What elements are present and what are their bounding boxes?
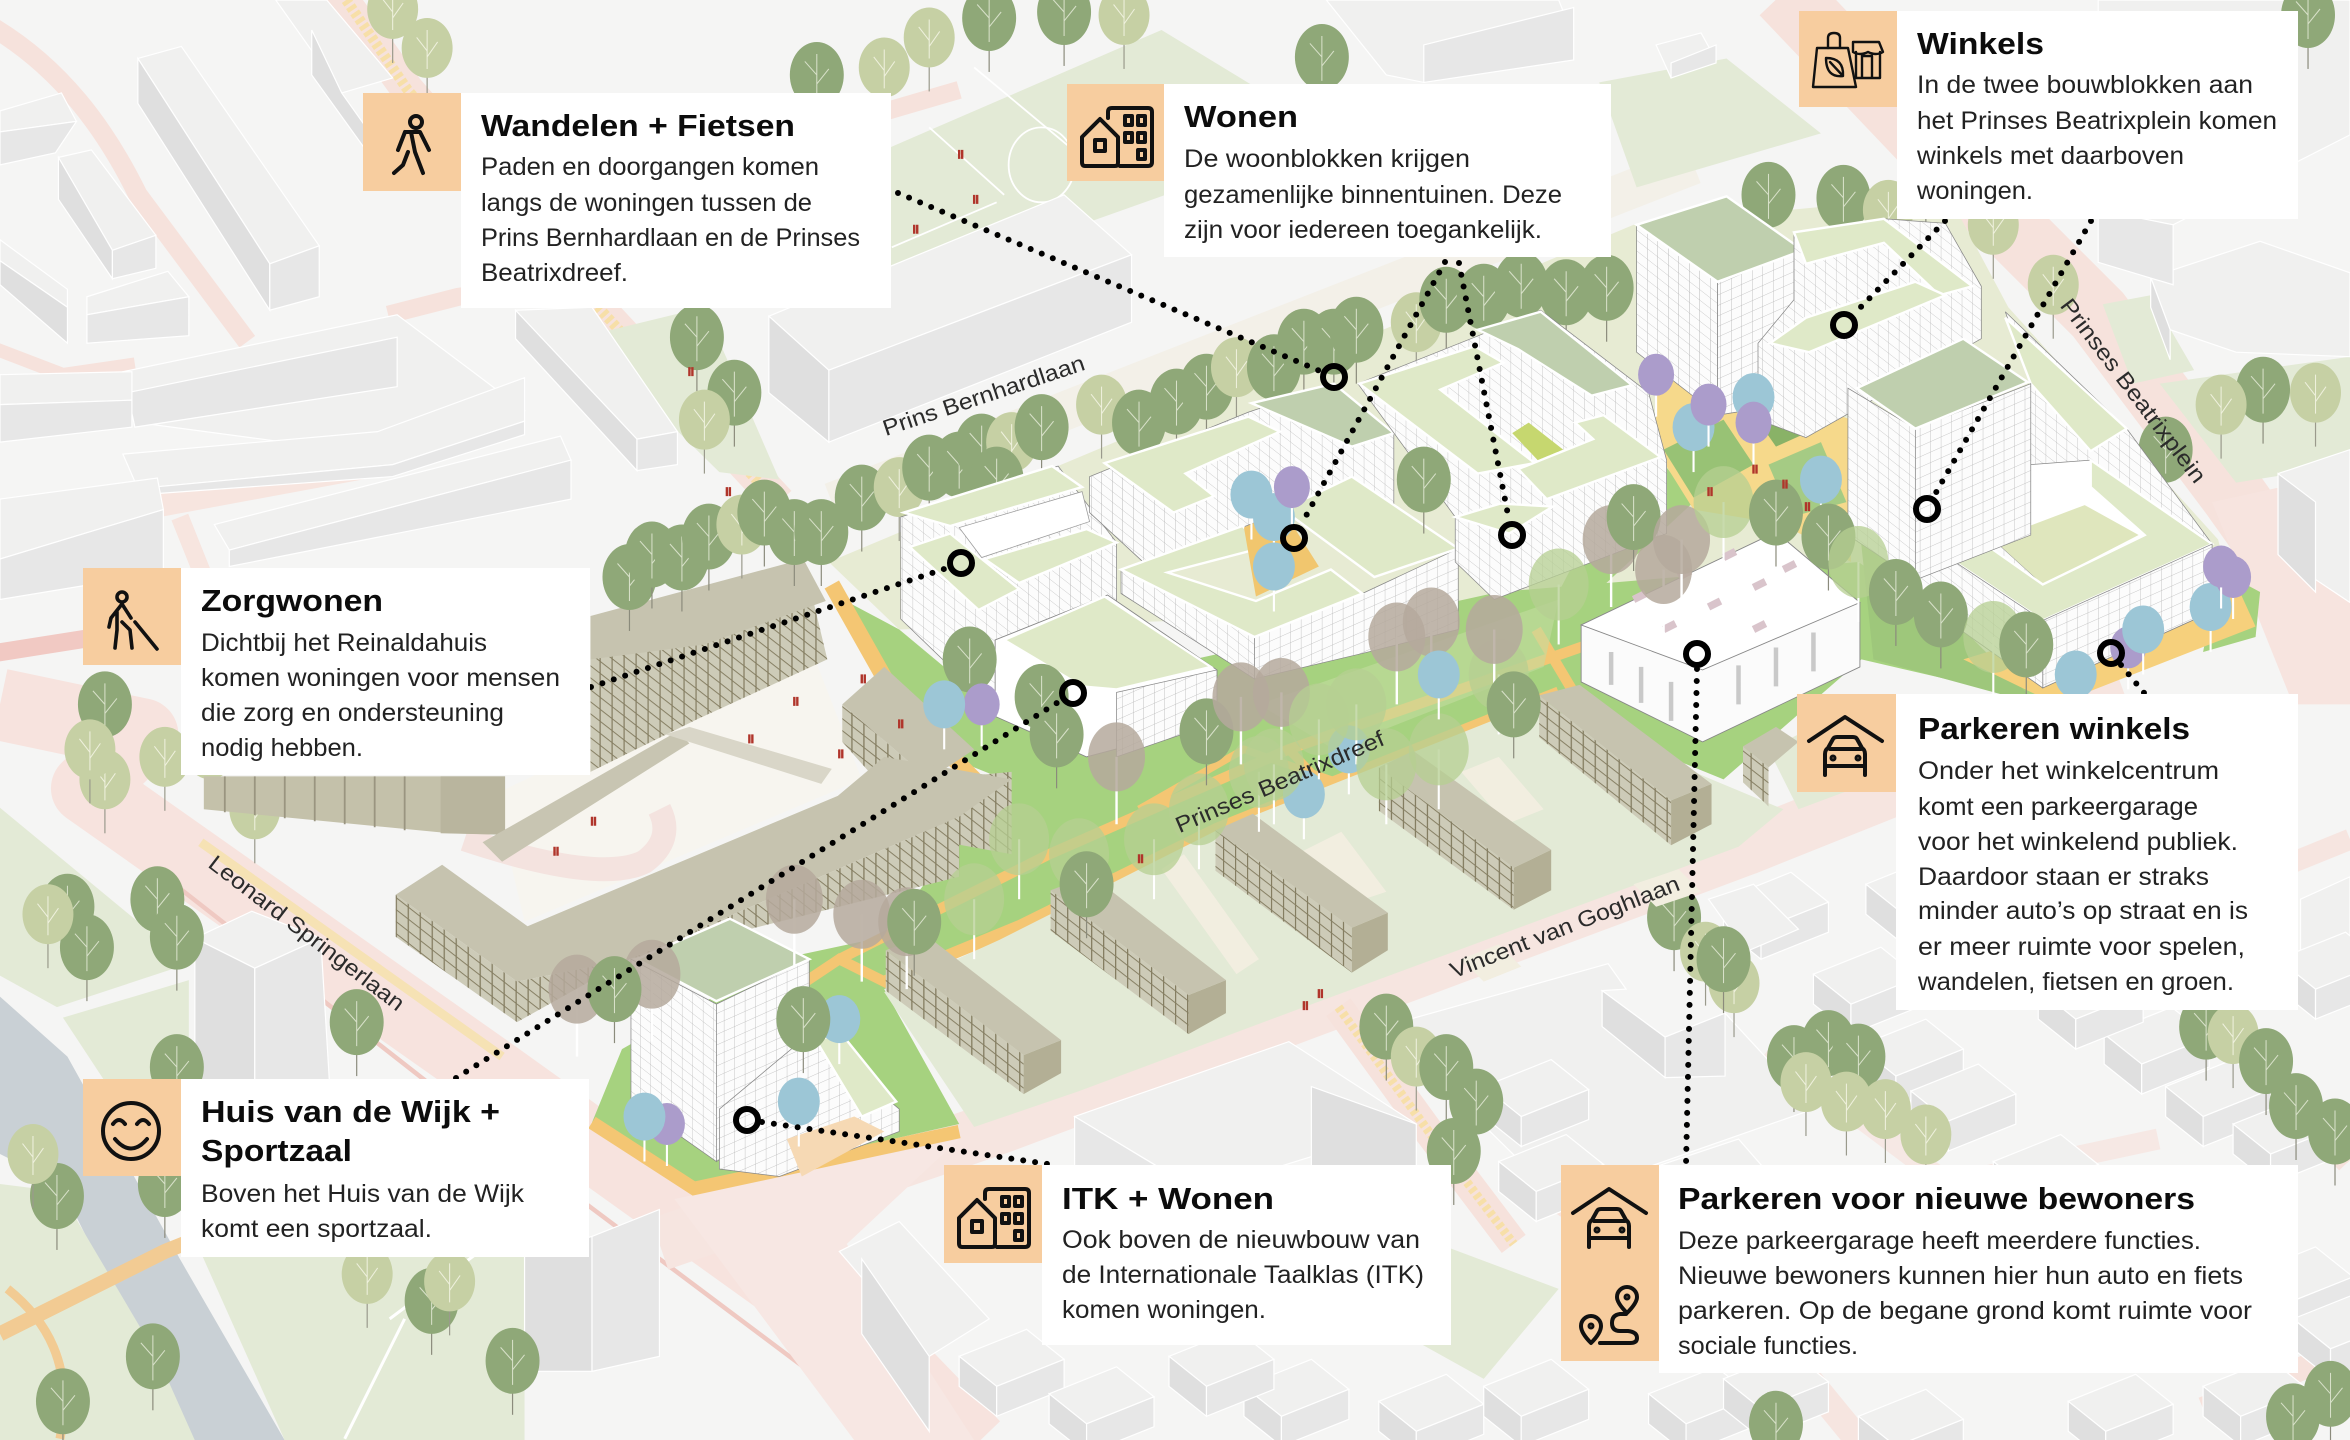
heading: Zorgwonen — [201, 583, 383, 618]
heading — [201, 1094, 500, 1168]
block D — [1090, 384, 1394, 585]
heading: Parkeren winkels — [1918, 711, 2190, 746]
icon: shopping bag and shop — [1813, 33, 1883, 87]
block J courtyard — [1915, 312, 2212, 688]
body text: gezamenlijke binnentuinen. Deze — [1184, 181, 1562, 209]
panel: Parkeren winkels — [1797, 694, 2298, 1010]
leader line: Winkels right — [1934, 221, 2091, 496]
location markers — [736, 314, 2122, 1131]
street-name labels — [204, 294, 2211, 1016]
body text: komt een parkeergarage — [1918, 793, 2198, 821]
heading: Wandelen + Fietsen — [481, 108, 795, 143]
heading: Huis van de Wijk + — [201, 1094, 500, 1129]
leader line: Wandelen + Fietsen — [898, 193, 1320, 371]
body text: Dichtbij het Reinaldahuis — [201, 629, 487, 657]
tower L and low block — [631, 919, 899, 1176]
body text: Nieuwe bewoners kunnen hier hun auto en fiets — [1678, 1262, 2243, 1290]
grey city blocks north-west — [0, 0, 2350, 974]
body text — [1917, 757, 2248, 996]
body text — [1678, 1227, 2252, 1360]
icon: houses — [1082, 108, 1152, 166]
body text: de Internationale Taalklas (ITK) — [1062, 1261, 1424, 1289]
trees along Prins Bernhardlaan — [602, 150, 2079, 631]
leader line: Wonen right — [1459, 263, 1509, 520]
leader line: Winkels left — [1854, 221, 1945, 314]
tower I — [1848, 339, 2031, 580]
body text: Deze parkeergarage heeft meerdere functies. — [1678, 1227, 2201, 1255]
body text: langs de woningen tussen de — [481, 189, 812, 217]
heading: Winkels — [1917, 26, 2044, 61]
street-name labels: Prinses Beatrixdreef — [1172, 726, 1389, 838]
street-name labels: Leonard Springerlaan — [204, 850, 409, 1016]
icon: person with cane — [109, 592, 157, 649]
new white residential blocks — [631, 196, 2212, 1176]
body text: Boven het Huis van de Wijk — [201, 1180, 525, 1208]
body text — [1916, 71, 2277, 205]
trees within the new neighbourhood — [549, 354, 2251, 1166]
leader line: Huis van de Wijk — [456, 701, 1060, 1078]
soccer field lines — [892, 67, 1109, 247]
heading: Wonen — [1184, 99, 1298, 134]
leader line: Parkeren voor nieuwe bewoners — [1686, 669, 1697, 1165]
panel: Huis van de Wijk + Sportzaal — [83, 1079, 589, 1257]
block E — [1121, 477, 1458, 679]
parking building — [1581, 532, 1860, 742]
leader line: Zorgwonen — [591, 568, 947, 687]
block C — [995, 595, 1217, 757]
body text: Beatrixdreef. — [481, 259, 628, 287]
street-name labels: Prinses Beatrixplein — [2055, 294, 2211, 488]
tower G — [1637, 196, 1803, 415]
panel: Wonen — [1067, 84, 1611, 257]
body text: zijn voor iedereen toegankelijk. — [1184, 216, 1542, 244]
body text — [1062, 1226, 1424, 1324]
panel: Parkeren voor nieuwe bewoners — [1561, 1165, 2298, 1373]
icon: walking person — [394, 116, 429, 173]
water — [0, 997, 285, 1440]
block H — [1758, 219, 1981, 438]
body text: voor het winkelend publiek. — [1918, 828, 2238, 856]
street-name labels: Prins Bernhardlaan — [879, 350, 1088, 441]
body text: Daardoor staan er straks — [1918, 863, 2209, 891]
icon: route with pins — [1581, 1287, 1637, 1343]
body text: het Prinses Beatrixplein komen — [1917, 107, 2277, 135]
body text: wandelen, fietsen en groen. — [1917, 968, 2234, 996]
heading: Parkeren voor nieuwe bewoners — [1678, 1181, 2195, 1216]
heading: ITK + Wonen — [1062, 1181, 1274, 1216]
body text: komen woningen voor mensen — [201, 664, 560, 692]
body text — [201, 629, 560, 762]
body text: die zorg en ondersteuning — [201, 699, 504, 727]
street-name labels: Vincent van Goghlaan — [1446, 871, 1683, 983]
panel: Winkels — [1799, 11, 2298, 219]
body text: Prins Bernhardlaan en de Prinses — [481, 224, 860, 252]
body text: sociale functies. — [1678, 1332, 1858, 1360]
body text: Ook boven de nieuwbouw van — [1062, 1226, 1420, 1254]
leader line: Wonen left — [1301, 262, 1445, 525]
body text: komt een sportzaal. — [201, 1215, 432, 1243]
icon: car under roof — [1573, 1189, 1646, 1247]
body text — [1184, 145, 1562, 244]
body text: komen woningen. — [1062, 1296, 1266, 1324]
body text: De woonblokken krijgen — [1184, 145, 1470, 173]
panel: Wandelen + Fietsen — [363, 93, 891, 308]
pedestrians — [555, 150, 1809, 1010]
body text: In de twee bouwblokken aan — [1917, 71, 2253, 99]
Reinaldahuis existing buildings — [204, 559, 1012, 1022]
body text: Paden en doorgangen komen — [481, 153, 819, 181]
body text: woningen. — [1916, 177, 2033, 205]
icon: houses — [959, 1189, 1029, 1247]
body text: er meer ruimte voor spelen, — [1918, 933, 2245, 961]
body text: nodig hebben. — [201, 734, 363, 762]
leader line: Parkeren winkels — [2121, 665, 2145, 694]
body text: Onder het winkelcentrum — [1918, 757, 2219, 785]
icon: smiley — [103, 1103, 159, 1159]
panel: ITK + Wonen — [944, 1165, 1451, 1345]
block A — [901, 466, 1117, 704]
pale lawns with slab flats — [884, 685, 1858, 1127]
heading: Sportzaal — [201, 1133, 352, 1168]
neighbourhood green ground — [592, 195, 2260, 1188]
icon: car under roof — [1809, 717, 1882, 775]
body text — [201, 1180, 525, 1243]
grey city blocks south — [195, 857, 2350, 1440]
block F — [1358, 310, 1667, 599]
body text: parkeren. Op de begane grond komt ruimte voor — [1678, 1297, 2252, 1325]
body text: minder auto’s op straat en is — [1918, 897, 2248, 925]
body text: winkels met daarboven — [1916, 142, 2184, 170]
panel: Zorgwonen — [83, 568, 590, 775]
leader line: ITK + Wonen — [762, 1122, 1055, 1165]
body text — [481, 153, 860, 287]
